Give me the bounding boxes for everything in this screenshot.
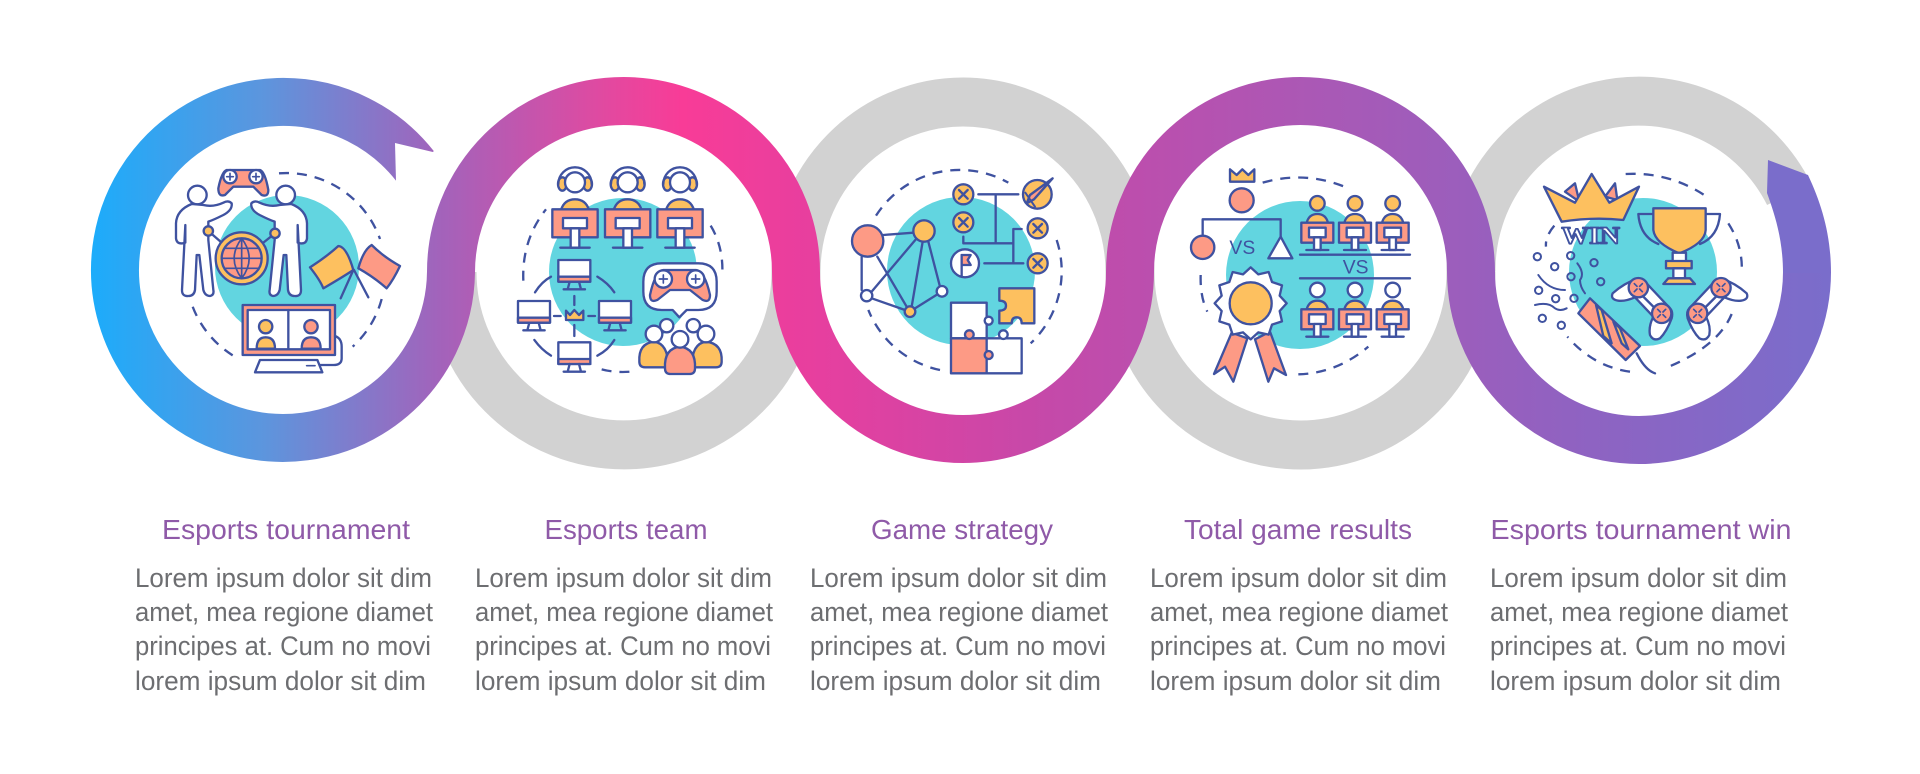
icon: total game results bbox=[1191, 169, 1410, 382]
step 3 text: Game strategy: lorem ipsum dolor sit dim bbox=[810, 666, 1101, 696]
step 4 text: Total game results: principes at. Cum no movi bbox=[1150, 631, 1446, 661]
icon: game strategy bbox=[852, 170, 1062, 373]
gray background rings bbox=[452, 101, 1789, 445]
step 1 text: Esports tournament: Lorem ipsum dolor sit dim bbox=[135, 563, 432, 593]
step 4 text: Total game results: Lorem ipsum dolor sit dim bbox=[1150, 563, 1447, 593]
step 1 text: Esports tournament: lorem ipsum dolor sit dim bbox=[135, 666, 426, 696]
step 3 text: Game strategy: Lorem ipsum dolor sit dim bbox=[810, 563, 1107, 593]
teal backdrop circles bbox=[215, 195, 1717, 349]
icon: esports tournament bbox=[176, 170, 400, 372]
step 3 text: Game strategy: principes at. Cum no movi bbox=[810, 631, 1106, 661]
step 3 text: Game strategy bbox=[810, 514, 1108, 696]
step 4 text: Total game results: Total game results bbox=[1184, 514, 1412, 545]
step 2 text: Esports team: lorem ipsum dolor sit dim bbox=[475, 666, 766, 696]
step 2 text: Esports team: principes at. Cum no movi bbox=[475, 631, 771, 661]
icon: total game results: VS bbox=[1229, 238, 1255, 259]
icon: esports team bbox=[518, 167, 722, 374]
step 5 text: Esports tournament win: amet, mea regione diamet bbox=[1490, 597, 1788, 627]
step 5 text: Esports tournament win bbox=[1490, 514, 1792, 696]
icon: total game results: VS bbox=[1343, 257, 1369, 278]
step 5 text: Esports tournament win: lorem ipsum dolor sit dim bbox=[1490, 666, 1781, 696]
step 1 text: Esports tournament bbox=[135, 514, 433, 696]
step 3 text: Game strategy: amet, mea regione diamet bbox=[810, 597, 1108, 627]
step 4 text: Total game results: lorem ipsum dolor sit dim bbox=[1150, 666, 1441, 696]
step 5 text: Esports tournament win: Lorem ipsum dolor sit dim bbox=[1490, 563, 1787, 593]
step 2 text: Esports team bbox=[475, 514, 773, 696]
step 4 text: Total game results: amet, mea regione diamet bbox=[1150, 597, 1448, 627]
step 2 text: Esports team: Esports team bbox=[544, 514, 708, 545]
step 1 text: Esports tournament: amet, mea regione diamet bbox=[135, 597, 433, 627]
icon: esports tournament win bbox=[1534, 174, 1747, 373]
step 3 text: Game strategy: Game strategy bbox=[871, 514, 1053, 545]
gradient ribbon connecting the five circles bbox=[115, 101, 1831, 440]
step 5 text: Esports tournament win: principes at. Cum no movi bbox=[1490, 631, 1786, 661]
step 4 text: Total game results bbox=[1150, 514, 1448, 696]
icon: esports tournament win: WIN bbox=[1561, 223, 1620, 249]
step 2 text: Esports team: Lorem ipsum dolor sit dim bbox=[475, 563, 772, 593]
step 5 text: Esports tournament win: Esports tournament win bbox=[1490, 514, 1792, 545]
step 1 text: Esports tournament: principes at. Cum no movi bbox=[135, 631, 431, 661]
step 1 text: Esports tournament: Esports tournament bbox=[162, 514, 410, 545]
step 2 text: Esports team: amet, mea regione diamet bbox=[475, 597, 773, 627]
